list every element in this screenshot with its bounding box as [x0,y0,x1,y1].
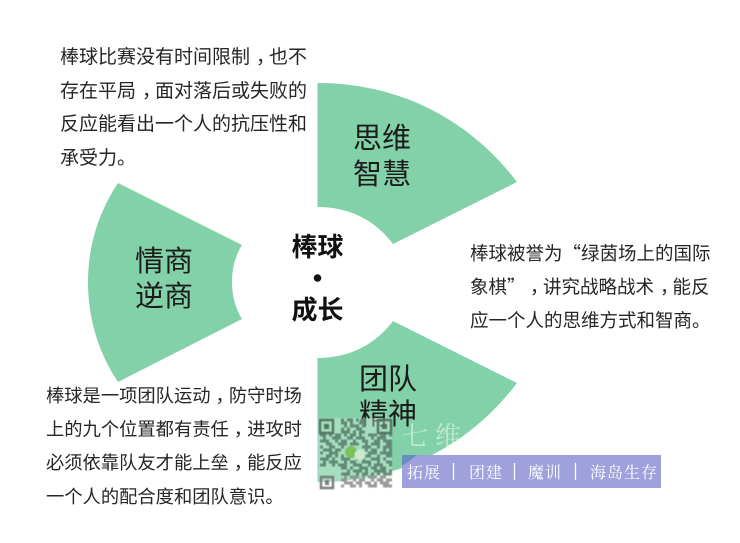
text block: bottom left: 棒球是一项团队运动 [46,382,211,408]
banner text: 海岛生存 [590,460,658,483]
banner text: 魔训 [528,460,562,483]
sector: 情商逆商 [88,183,242,382]
center title: 棒球 [291,227,344,264]
banner text: 拓展 [407,460,441,483]
sector: 思维智慧 [318,83,517,244]
text block: right: 棒球被誉为“绿茵场上的国际 [470,240,711,266]
center title [291,227,344,327]
center dot [314,274,321,282]
text block: top left: 承受力。 [60,143,136,170]
text block: right: ，能反 [660,274,710,300]
banner [402,455,661,488]
label: 团队精神: 精神 [359,391,417,433]
text block: bottom left: ，能反应 [234,449,302,475]
text block: top left: 棒球比赛没有时间限制 [60,42,250,69]
label: 团队精神: 团队 [359,356,417,398]
QR code [318,418,392,488]
text block: top left: ，面对落后或失败的 [142,76,307,103]
text block: top left: 存在平局 [60,76,136,103]
text block: top left: ，也不 [256,42,307,69]
label: 情商逆商: 逆商 [135,273,193,315]
text block: right: 象棋” [470,274,526,300]
text block: bottom left: 上的九个位置都有责任 [46,416,229,442]
label: 思维智慧: 思维 [353,115,411,157]
watermark: 七维 [402,416,468,453]
text block: bottom left: ，进攻时 [234,416,302,442]
label: 思维智慧: 智慧 [353,151,411,193]
center title: 成长 [291,290,344,327]
text block: bottom left: 一个人的配合度和团队意识。 [46,483,284,509]
QR center logo [345,446,357,458]
sector: 团队精神 [318,321,517,482]
QR finder patterns [320,420,391,433]
banner text: 团建 [469,460,503,483]
text block: bottom left: 必须依靠队友才能上垒 [46,449,229,475]
text block: top left: 反应能看出一个人的抗压性和 [60,109,307,136]
text block: right: ， [530,274,549,300]
text block: right: 应一个人的思维方式和智商。 [470,307,711,333]
text block: bottom left: ，防守时场 [216,382,302,408]
label: 情商逆商: 情商 [135,238,193,280]
text block: right: 讲究战略战术 [543,274,654,300]
